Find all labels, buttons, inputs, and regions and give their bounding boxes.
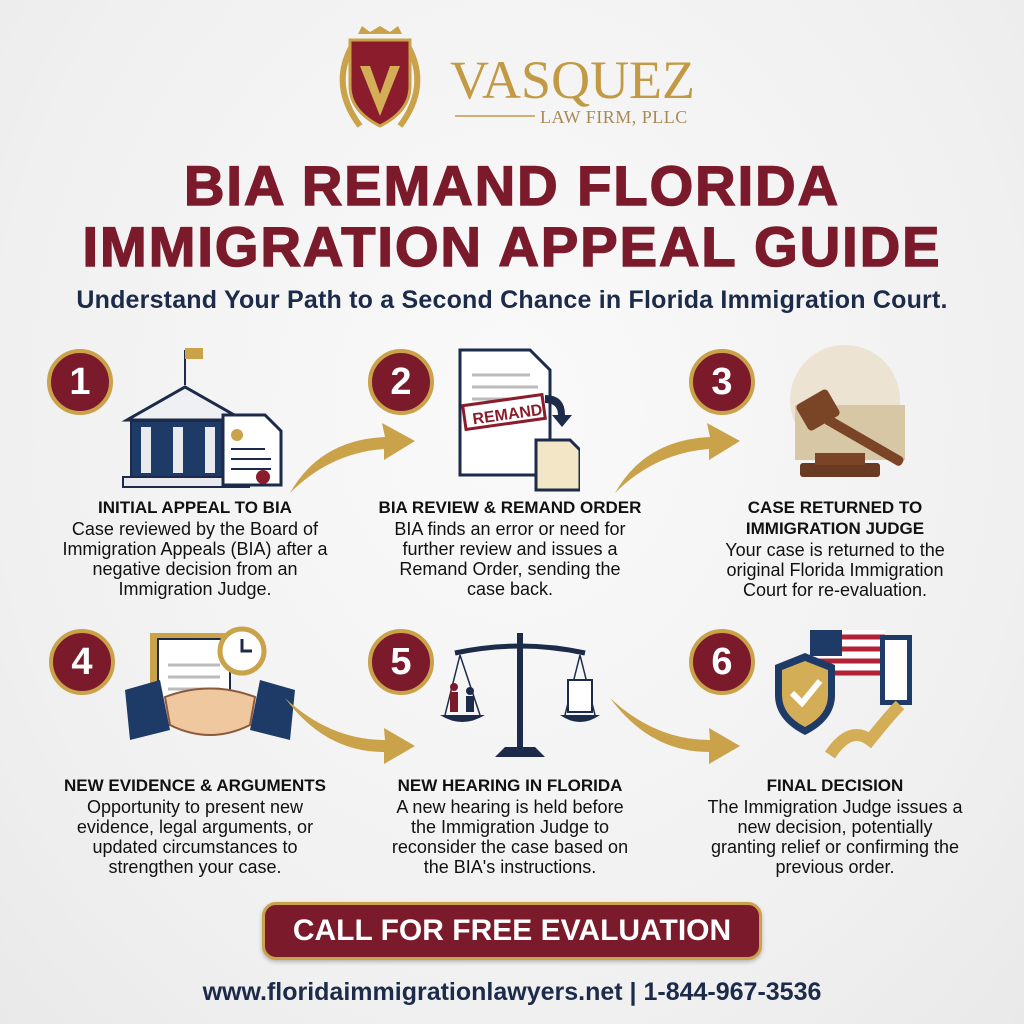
text: step 3: original Florida Immigration [726, 560, 944, 580]
title: BIA REMAND FLORIDA [184, 154, 840, 217]
text: step 3: CASE RETURNED TO [748, 498, 922, 517]
arrow 1-2 [290, 423, 415, 493]
text: step 4 [64, 776, 326, 877]
text: step 6: granting relief or confirming the [711, 837, 959, 857]
text: step 4: strengthen your case. [108, 857, 282, 877]
text: step 2 [379, 498, 641, 599]
cta button [262, 902, 762, 960]
step 5 [368, 629, 628, 877]
logo: VASQUEZ [450, 50, 695, 110]
text: step 5: NEW HEARING IN FLORIDA [398, 776, 622, 795]
text: step 1: negative decision from an [92, 559, 298, 579]
text: step 1: Immigration Judge. [118, 579, 272, 599]
step 6 [689, 629, 963, 877]
text: step 3: Court for re-evaluation. [743, 580, 927, 600]
arrow 4-5 [285, 698, 415, 764]
text: step 6: The Immigration Judge issues a [707, 797, 963, 817]
text: step 5 [392, 776, 628, 877]
logo [340, 26, 695, 128]
text: step 6 [707, 776, 963, 877]
text: step 5: the BIA's instructions. [424, 857, 596, 877]
logo: LAW FIRM, PLLC [540, 107, 688, 127]
arrow 2-3 [615, 423, 740, 493]
text: step 4: Opportunity to present new [87, 797, 303, 817]
icon: laurel shield [343, 26, 417, 126]
subtitle: Understand Your Path to a Second Chance in Florida Immigration Court. [76, 286, 948, 314]
icon: scales of justice [440, 633, 600, 757]
text: step 5: reconsider the case based on [392, 837, 628, 857]
text: step 5: the Immigration Judge to [411, 817, 609, 837]
text: step 3: IMMIGRATION JUDGE [746, 519, 924, 538]
text: step 3: Your case is returned to the [725, 540, 945, 560]
cta button: CALL FOR FREE EVALUATION [293, 914, 731, 947]
number 6 [689, 629, 755, 695]
number 3 [689, 349, 755, 415]
number 5: 5 [390, 641, 412, 683]
text: step 3 [725, 498, 945, 600]
text: step 2: BIA REVIEW & REMAND ORDER [379, 498, 641, 517]
text: step 2: Remand Order, sending the [399, 559, 621, 579]
text: step 1 [62, 498, 328, 599]
text: step 4: NEW EVIDENCE & ARGUMENTS [64, 776, 326, 795]
icon: remand document [458, 348, 580, 492]
step 3 [689, 345, 945, 600]
text: step 2: case back. [467, 579, 553, 599]
step 4 [49, 626, 326, 877]
text: step 4: updated circumstances to [92, 837, 298, 857]
number 6: 6 [711, 641, 733, 683]
text: step 2: further review and issues a [402, 539, 618, 559]
footer contact: www.floridaimmigrationlawyers.net | 1-844-967-3536 [203, 978, 821, 1006]
icon: shield flag door [775, 630, 912, 758]
icon: handshake documents [125, 626, 295, 740]
icon: gavel courtroom [790, 345, 905, 477]
icon: courthouse document [122, 348, 282, 488]
number 4 [49, 629, 115, 695]
number 1 [47, 349, 113, 415]
text: step 2: BIA finds an error or need for [394, 519, 626, 539]
text: step 1: Immigration Appeals (BIA) after a [62, 539, 328, 559]
title line 2: IMMIGRATION APPEAL GUIDE [82, 215, 942, 278]
number 2: 2 [390, 361, 412, 403]
arrow 5-6 [610, 698, 740, 764]
text: step 5: A new hearing is held before [396, 797, 624, 817]
number 2 [368, 349, 434, 415]
number 4: 4 [71, 641, 93, 683]
text: step 1: Case reviewed by the Board of [72, 519, 318, 539]
text: step 4: evidence, legal arguments, or [77, 817, 313, 837]
icon: remand document: REMAND [472, 402, 544, 428]
number 1: 1 [69, 361, 91, 403]
text: step 6: FINAL DECISION [767, 776, 903, 795]
text: step 6: new decision, potentially [737, 817, 933, 837]
text: step 1: INITIAL APPEAL TO BIA [98, 498, 292, 517]
number 3: 3 [711, 361, 733, 403]
step 1 [47, 348, 328, 599]
step 2 [368, 348, 641, 599]
text: step 6: previous order. [775, 857, 895, 877]
number 5 [368, 629, 434, 695]
